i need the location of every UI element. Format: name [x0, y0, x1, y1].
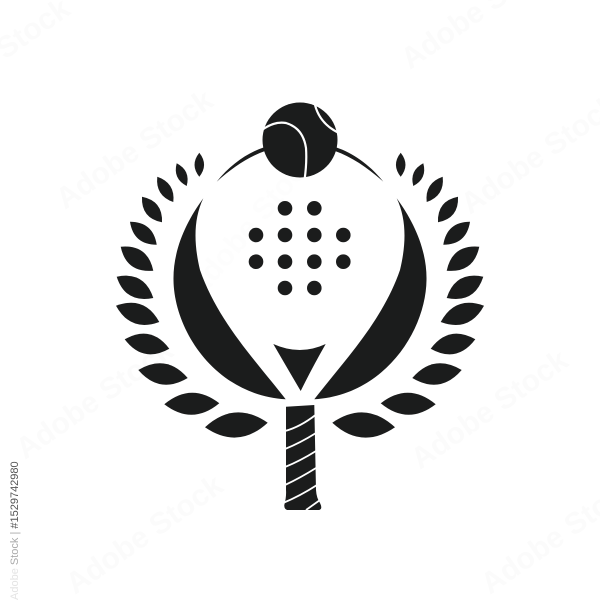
racket frame: top right arc — [335, 148, 383, 182]
stock id text: Adobe Stock | #1529742980 — [9, 461, 21, 600]
racket frame: right side — [314, 198, 427, 399]
watermark pattern: Adobe Stock — [180, 143, 323, 304]
racket frame: top left arc — [217, 148, 265, 182]
watermark pattern: Adobe Stock — [50, 83, 219, 216]
racket handle with grip tape — [283, 405, 321, 510]
racket face holes — [249, 201, 351, 295]
emblem: padel racket and wreath — [116, 102, 484, 510]
watermark pattern: Adobe Stock — [60, 468, 229, 600]
watermark pattern: Adobe Stock — [10, 333, 179, 466]
wreath: right branch — [332, 153, 484, 438]
watermark pattern: Adobe Stock — [405, 343, 574, 476]
wreath: left branch — [116, 153, 268, 438]
racket throat triangle — [273, 344, 326, 391]
tennis ball — [262, 102, 339, 180]
racket frame: left side — [173, 198, 286, 399]
